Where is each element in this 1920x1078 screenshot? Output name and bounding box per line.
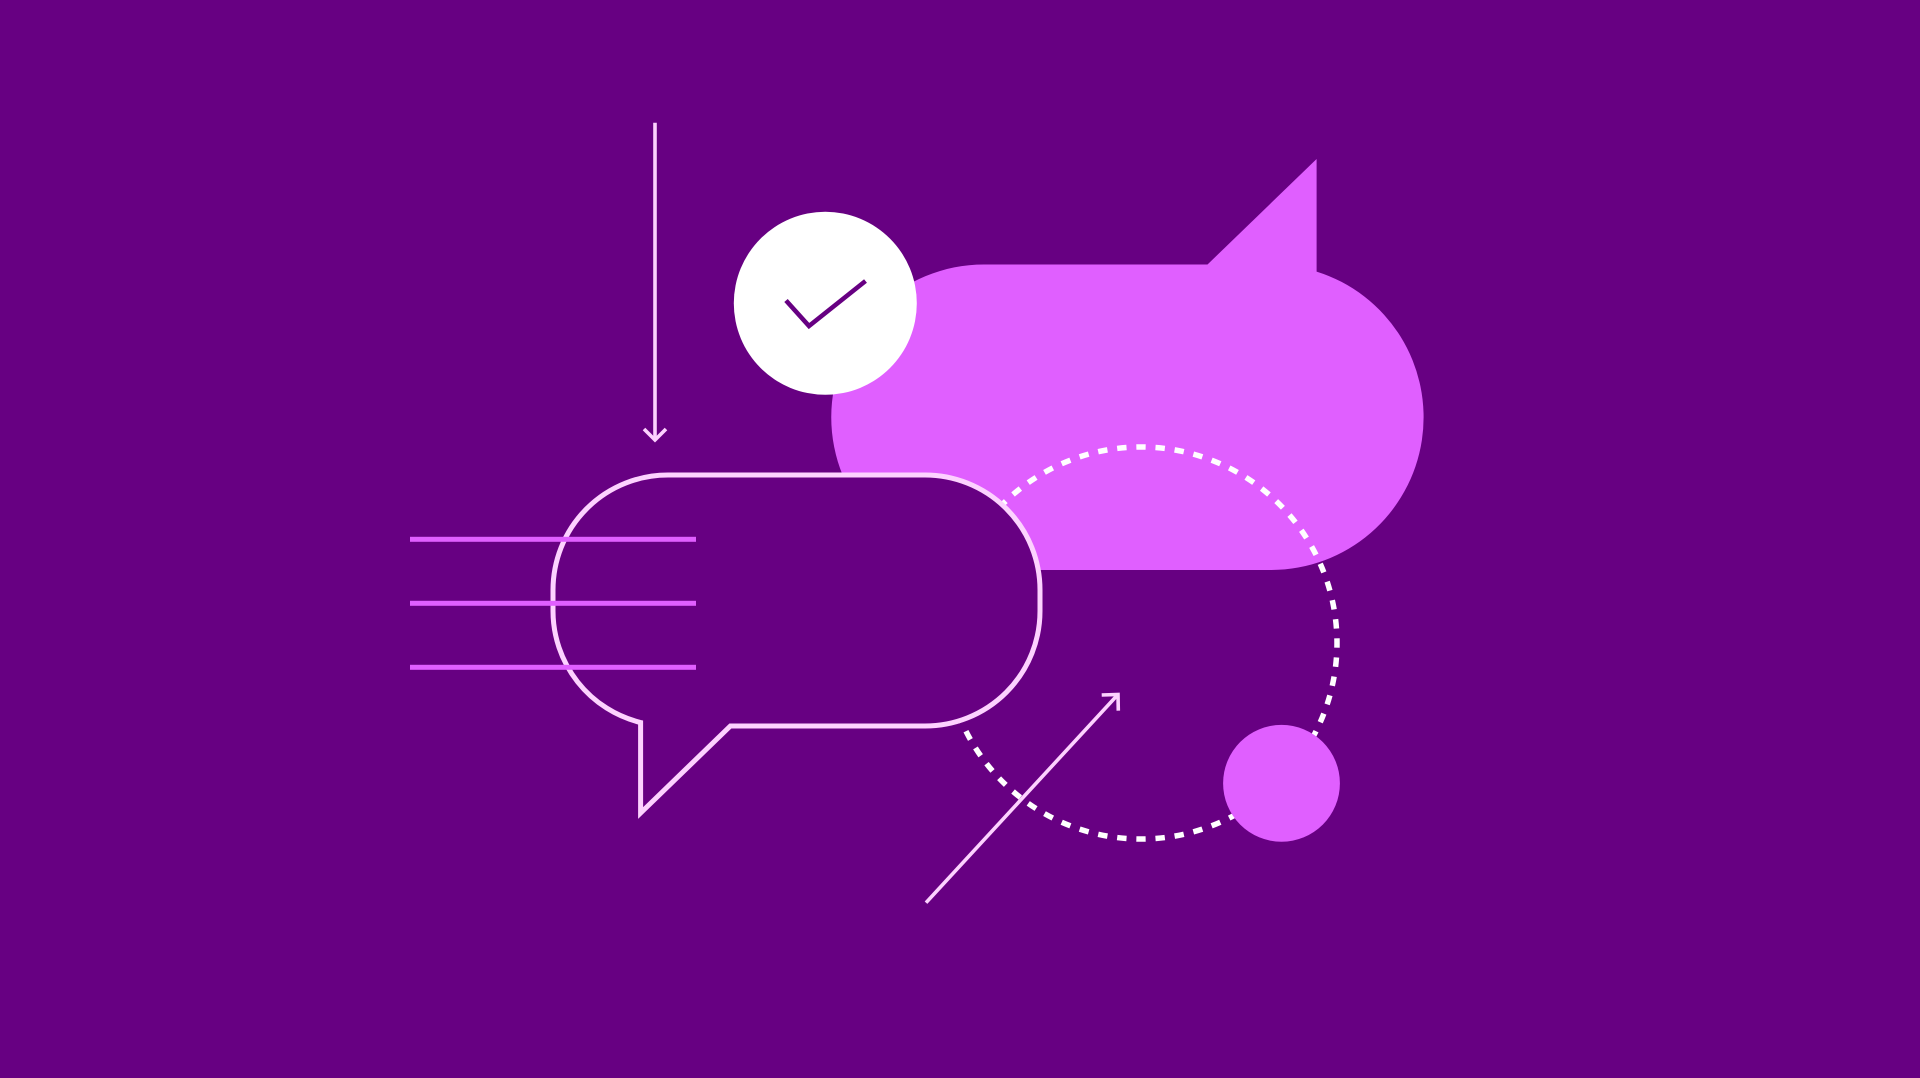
filled pink speech bubble: [831, 159, 1424, 570]
three horizontal lines: [410, 537, 696, 670]
arrow: diagonal up-right: [926, 694, 1118, 903]
outlined speech bubble: [553, 475, 1040, 813]
small pink circle: [1223, 725, 1340, 842]
icon: white circle with check mark: [734, 212, 917, 395]
arrow: downward: [644, 123, 666, 440]
dashed circle: [945, 447, 1337, 839]
